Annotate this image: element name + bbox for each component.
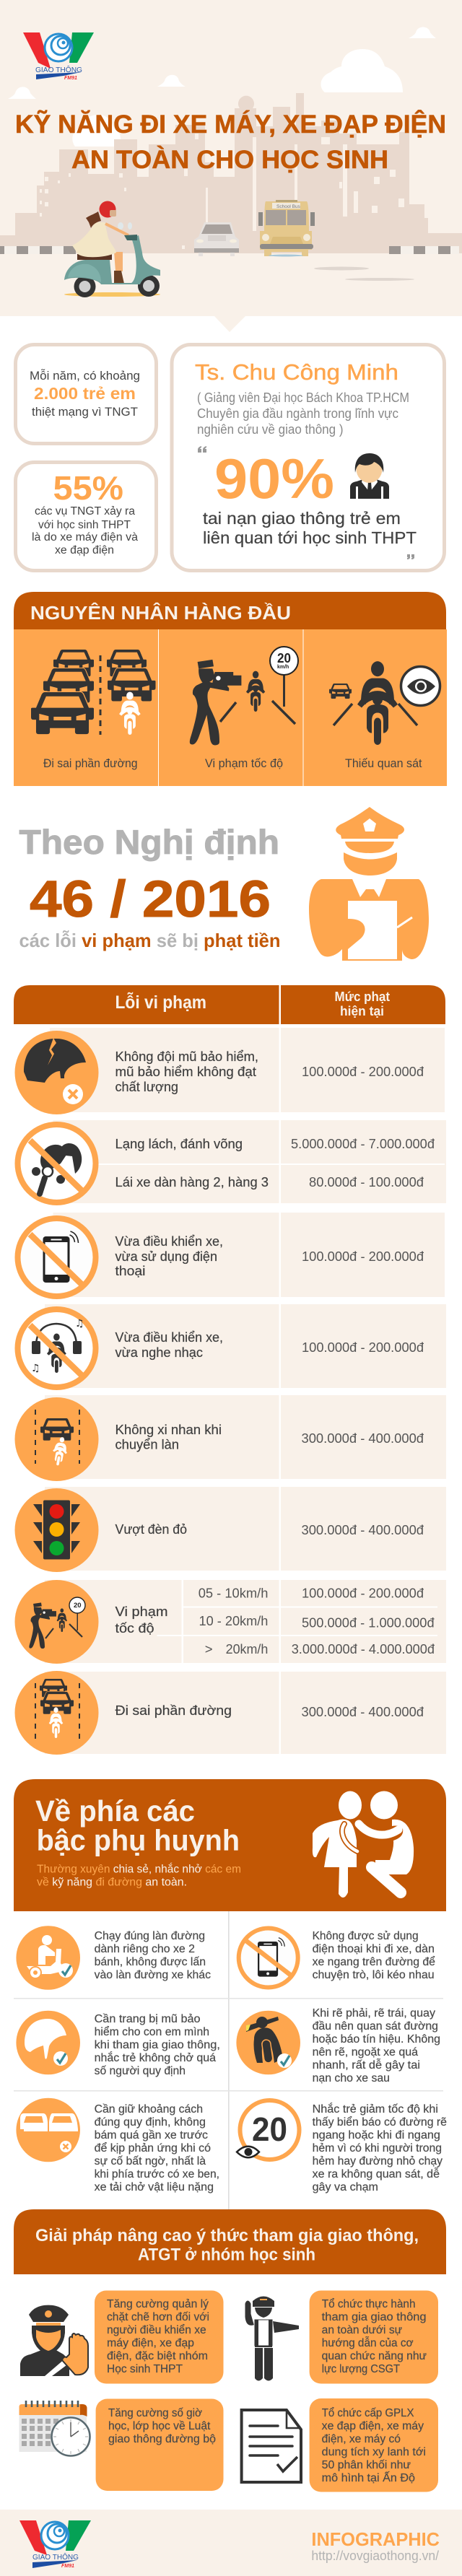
- logo VOV: GIAO THÔNG: [35, 65, 82, 74]
- solution box 1: Tăng cường quản lý: [107, 2298, 209, 2310]
- row: listening to music: Vừa điều khiển xe,: [116, 1330, 223, 1345]
- row: phone use: 100.000đ - 200.000đ: [302, 1249, 424, 1264]
- solution box 1: người điều khiển xe: [107, 2324, 206, 2336]
- row: speeding: 3.000.000đ - 4.000.000đ: [292, 1641, 435, 1656]
- row: speeding: 100.000đ - 200.000đ: [302, 1586, 424, 1601]
- tip: keep to the lane: Chạy đúng làn đường: [95, 1930, 205, 1942]
- card: 55 percent: là do xe máy điện và: [32, 531, 138, 543]
- card: 2000 children: [16, 345, 156, 443]
- cause labels: Đi sai phần đường: [43, 757, 137, 770]
- solution box 2: Tổ chức thực hành: [322, 2298, 416, 2310]
- row: phone use: vừa sử dụng điện: [116, 1249, 217, 1264]
- solution box 2: tham gia giao thông: [322, 2311, 427, 2323]
- row: listening to music: vừa nghe nhạc: [116, 1345, 203, 1360]
- tip: reduce speed: ngang hoặc khi đi ngang: [313, 2129, 440, 2141]
- icon: turning motorcycle: [236, 2011, 300, 2074]
- row: helmet: mũ bảo hiểm không đạt: [116, 1065, 256, 1079]
- card: 2000 children: thiệt mạng vì TNGT: [32, 406, 138, 419]
- tip: keep distance: bám quá gần xe trước: [95, 2129, 208, 2141]
- row: helmet: [14, 1028, 445, 1114]
- row: red light: [14, 1487, 446, 1572]
- tip: reduce speed: Nhắc trẻ giảm tốc độ khi: [313, 2103, 438, 2116]
- icon: scooter rider: [16, 1926, 80, 1990]
- icon: speed violation: [190, 647, 298, 745]
- card: 55 percent: 55%: [53, 469, 123, 507]
- icon: white helmet: [16, 2011, 80, 2074]
- row: no turn signal: Không xi nhan khi: [116, 1423, 222, 1437]
- solution box 2: an toàn dưới sự: [322, 2324, 402, 2336]
- cause labels: Thiếu quan sát: [345, 757, 422, 770]
- icon: broken helmet: [14, 1031, 98, 1114]
- solution box 1: máy điện, xe đạp: [107, 2337, 194, 2349]
- solution box 4: [310, 2398, 438, 2492]
- tip: reduce speed: hẻm hay đường nhỏ chạy: [313, 2155, 443, 2167]
- solution box 4: dung tích xy lanh tới: [322, 2446, 426, 2458]
- tip: keep to the lane: vào làn đường xe khác: [95, 1969, 211, 1981]
- tip: turning safely: nhanh, rất dễ gây tai: [313, 2059, 420, 2071]
- row: weaving and riding abreast: [17, 1120, 446, 1203]
- row: wrong lane: [14, 1671, 446, 1755]
- title: AN TOÀN CHO HỌC SINH: [71, 145, 388, 174]
- solution box 3: [96, 2399, 224, 2491]
- tip: wear a helmet: [16, 2011, 220, 2077]
- icon: speed limit sign and eye: [237, 2100, 299, 2160]
- hero banner: [0, 0, 462, 332]
- footer logo VOV: GIAO THÔNG: [32, 2552, 79, 2562]
- table header: Lỗi vi phạm: [116, 991, 206, 1013]
- tip: reduce speed: gây va chạm: [313, 2181, 378, 2193]
- row: speeding: >: [205, 1641, 213, 1656]
- icon: speed violation: 20: [277, 651, 291, 665]
- tip: keep distance: xe tải chở vật liệu nặng: [95, 2181, 214, 2193]
- row: speeding: 20km/h: [226, 1641, 268, 1656]
- card: expert quote: ( Giảng viên Đại học Bách Khoa TP.HCM: [197, 390, 409, 405]
- icon: no phone: [239, 1929, 298, 1988]
- solution box 4: mô hình tại Ấn Độ: [322, 2472, 415, 2484]
- icon: opening quote mark: [198, 446, 206, 453]
- card: expert quote: [172, 345, 445, 570]
- illustration: car: [194, 222, 239, 256]
- row: speeding: 10 - 20km/h: [199, 1613, 268, 1628]
- table: violations and fines: [14, 985, 446, 1755]
- row: helmet: chất lượng: [116, 1080, 178, 1094]
- tip: no phone: [239, 1929, 435, 1988]
- tip: no phone: Không được sử dụng: [313, 1930, 419, 1942]
- row: no turn signal: [14, 1395, 446, 1481]
- row: listening to music: 100.000đ - 200.000đ: [302, 1340, 424, 1355]
- card: expert quote: Ts. Chu Công Minh: [195, 359, 398, 385]
- tip: keep distance: để kịp phản ứng khi có: [95, 2142, 211, 2154]
- icon: speed camera: [14, 1580, 98, 1664]
- solutions heading: [14, 2209, 446, 2274]
- card: expert quote: Chuyên gia đầu ngành trong lĩnh vực: [197, 406, 398, 421]
- row: weaving and riding abreast: 80.000đ - 100.000đ: [309, 1174, 424, 1189]
- row: helmet: Không đội mũ bảo hiểm,: [116, 1049, 258, 1064]
- icon: wrong lane: [14, 1671, 98, 1755]
- tip: wear a helmet: khi tham gia giao thông,: [95, 2039, 220, 2051]
- card: expert quote: liên quan tới học sinh THPT: [203, 528, 417, 547]
- row: no turn signal: 300.000đ - 400.000đ: [302, 1431, 424, 1446]
- tip: turning safely: hoặc báo tín hiệu. Không: [313, 2033, 440, 2045]
- row: wrong lane: 300.000đ - 400.000đ: [302, 1704, 424, 1719]
- icon: no weaving: [17, 1125, 95, 1202]
- tip: keep to the lane: bánh, không được lấn: [95, 1956, 206, 1968]
- row: phone use: [17, 1213, 445, 1297]
- tip: keep to the lane: dành riêng cho xe 2: [95, 1943, 195, 1955]
- cause labels: [43, 757, 422, 770]
- table header: Mức phạt: [335, 990, 390, 1004]
- solutions heading: Giải pháp nâng cao ý thức tham gia giao thông,: [35, 2226, 419, 2245]
- card: expert quote: 90%: [214, 447, 334, 510]
- footer: http://vovgiaothong.vn/: [311, 2549, 439, 2563]
- footer: [0, 2510, 462, 2576]
- tip: no phone: chuyện trò, lôi kéo nhau: [313, 1969, 435, 1981]
- tip: reduce speed: xe ra không quan sát, dễ: [313, 2168, 440, 2180]
- tip: keep distance: Cần giữ khoảng cách: [95, 2103, 203, 2116]
- tip: reduce speed: [237, 2100, 447, 2193]
- row: speeding: tốc độ: [116, 1621, 154, 1636]
- heading: NGUYÊN NHÂN HÀNG ĐẦU: [30, 602, 291, 624]
- illustration: school bus: School Bus: [276, 204, 301, 209]
- row: no turn signal: chuyển làn: [116, 1438, 179, 1452]
- icon: speed violation: km/h: [277, 665, 289, 670]
- solution box 3: học, lớp học về Luật: [108, 2420, 211, 2432]
- title: KỸ NĂNG ĐI XE MÁY, XE ĐẠP ĐIỆN: [15, 110, 446, 139]
- card: expert quote: tai nạn giao thông trẻ em: [203, 509, 401, 528]
- icon: no phone: [17, 1218, 95, 1296]
- row: speeding: [14, 1580, 446, 1664]
- tip: turning safely: nên rẽ, ngoặt xe quá: [313, 2046, 418, 2058]
- icon: officer raising hand: [20, 2305, 88, 2376]
- heading: decree 46/2016: Theo Nghị định: [19, 823, 279, 861]
- row: wrong lane: Đi sai phần đường: [116, 1703, 232, 1718]
- road markings: [0, 246, 459, 281]
- icon: two cars: [16, 2098, 80, 2162]
- row: weaving and riding abreast: 5.000.000đ - 7.000.000đ: [291, 1136, 435, 1151]
- icon: calendar and clock: [19, 2401, 90, 2455]
- icon: traffic light: [14, 1488, 98, 1572]
- solution box 2: quan chức năng như: [322, 2350, 427, 2362]
- panel: solutions: [14, 2209, 446, 2492]
- logo VOV: FM91: [64, 76, 77, 81]
- heading: decree 46/2016: [19, 823, 280, 951]
- solution box 3: giao thông đường bộ: [108, 2433, 216, 2445]
- panel: parents section: [14, 1779, 447, 2209]
- icon: wrong lane: [31, 650, 156, 735]
- solution box 2: [310, 2291, 438, 2383]
- title: [15, 110, 446, 174]
- panel: leading causes: [14, 592, 447, 786]
- tip: keep distance: sự cố bất ngờ, nhất là: [95, 2155, 206, 2167]
- logo VOV: [23, 32, 94, 81]
- row: speeding: 500.000đ - 1.000.000đ: [302, 1615, 435, 1630]
- tip: keep distance: đúng quy định, không: [95, 2116, 206, 2129]
- card: 55 percent: [16, 462, 156, 570]
- row: weaving and riding abreast: Lạng lách, đánh võng: [116, 1137, 243, 1151]
- icon: speed limit sign and eye: 20: [252, 2110, 287, 2148]
- icon: lane change: [14, 1397, 98, 1481]
- city skyline: [0, 93, 462, 253]
- row: weaving and riding abreast: Lái xe dàn hàng 2, hàng 3: [116, 1175, 269, 1189]
- tip: turning safely: đầu nên quan sát đường: [313, 2020, 438, 2033]
- icon: no headphones: ♫: [75, 1318, 84, 1330]
- cause labels: Vi phạm tốc độ: [205, 757, 283, 770]
- icon: no headphones: ♫: [31, 1363, 40, 1374]
- tip: no phone: điện thoại khi đi xe, dàn: [313, 1943, 435, 1955]
- solution box 4: xe đạp điện, xe máy: [322, 2420, 424, 2432]
- tip: keep distance: khi phía trước có xe ben,: [95, 2168, 219, 2180]
- footer: INFOGRAPHIC: [311, 2528, 440, 2550]
- parents banner: bậc phụ huynh: [37, 1824, 240, 1857]
- card: 55 percent: với học sinh THPT: [38, 519, 131, 531]
- icon: closing quote mark: [407, 554, 414, 559]
- icon: traffic officer: [246, 2297, 299, 2380]
- tip: reduce speed: hẻm vì có khi người trong: [313, 2142, 442, 2154]
- solution box 1: [95, 2291, 224, 2383]
- solution box 2: hướng dẫn của cơ: [322, 2337, 414, 2349]
- row: helmet: 100.000đ - 200.000đ: [302, 1064, 424, 1079]
- solution box 1: chặt chẽ hơn đối với: [107, 2311, 209, 2323]
- row: phone use: Vừa điều khiển xe,: [116, 1234, 223, 1249]
- footer logo VOV: FM91: [61, 2564, 74, 2569]
- table header: [14, 985, 445, 1024]
- heading: decree 46/2016: 46 / 2016: [30, 871, 271, 928]
- tip: keep distance: [16, 2098, 219, 2193]
- tip: wear a helmet: Cần trang bị mũ bảo: [95, 2013, 201, 2025]
- row: listening to music: [17, 1304, 446, 1388]
- clouds: [8, 27, 436, 147]
- icon: no headphones: [17, 1309, 95, 1387]
- row: speeding: Vi phạm: [116, 1604, 167, 1619]
- heading: decree 46/2016: các lỗi vi phạm sẽ bị phạt tiền: [19, 930, 280, 951]
- solution box 4: Tổ chức cấp GPLX: [322, 2407, 414, 2419]
- icon: parent and child: [313, 1791, 414, 1898]
- illustration: school bus: [258, 200, 315, 257]
- row: phone use: thoại: [116, 1264, 146, 1278]
- tip: turning safely: Khi rẽ phải, rẽ trái, quay: [313, 2007, 435, 2020]
- row: speeding: 05 - 10km/h: [199, 1586, 268, 1601]
- tip: keep to the lane: [16, 1926, 211, 1990]
- solution box 1: Học sinh THPT: [107, 2363, 183, 2375]
- parents banner: Về phía các: [35, 1794, 195, 1828]
- tip: reduce speed: thấy biển báo có đường rẽ: [313, 2116, 447, 2129]
- tip: wear a helmet: hiểm cho con em mình: [95, 2026, 209, 2038]
- solution box 4: 50 phân khối như: [322, 2459, 411, 2471]
- parents banner: [14, 1779, 446, 1911]
- card: 2000 children: Mỗi năm, có khoảng: [30, 369, 140, 383]
- parents banner: về kỹ năng đi đường an toàn.: [37, 1877, 187, 1889]
- parents banner: Thường xuyên chia sẻ, nhắc nhở các em: [37, 1862, 241, 1876]
- tip: wear a helmet: số người quy định: [95, 2065, 186, 2077]
- tip: turning safely: [236, 2007, 440, 2084]
- icon: person in suit: [350, 453, 389, 499]
- solutions heading: ATGT ở nhóm học sinh: [138, 2245, 315, 2265]
- row: red light: 300.000đ - 400.000đ: [302, 1522, 424, 1537]
- solution box 4: điện, xe máy có: [322, 2433, 401, 2445]
- card: 55 percent: các vụ TNGT xảy ra: [35, 505, 135, 518]
- icon: document with check: [242, 2410, 301, 2482]
- solution box 3: Tăng cường số giờ: [108, 2407, 202, 2419]
- footer logo VOV: [19, 2520, 91, 2569]
- icon: lack of observation: [329, 661, 440, 745]
- card: 2000 children: 2.000 trẻ em: [34, 384, 136, 403]
- row: red light: Vượt đèn đỏ: [116, 1522, 187, 1537]
- heading: [14, 592, 446, 629]
- card: 55 percent: xe đạp điện: [55, 544, 114, 556]
- solution box 1: điện, đặc biệt nhóm: [107, 2350, 208, 2362]
- tip: no phone: xe ngang trên đường để: [313, 1956, 435, 1968]
- illustration: girl on scooter: [64, 201, 160, 297]
- icon: police officer with clipboard: [309, 807, 429, 961]
- tip: turning safely: nạn cho xe sau: [313, 2072, 390, 2084]
- card: expert quote: nghiên cứu về giao thông ): [197, 422, 344, 437]
- table header: hiện tại: [340, 1004, 384, 1018]
- icon: speed camera: 20: [74, 1602, 82, 1610]
- tip: wear a helmet: nhắc trẻ không chở quá: [95, 2052, 216, 2064]
- solution box 2: lực lượng CSGT: [322, 2363, 400, 2375]
